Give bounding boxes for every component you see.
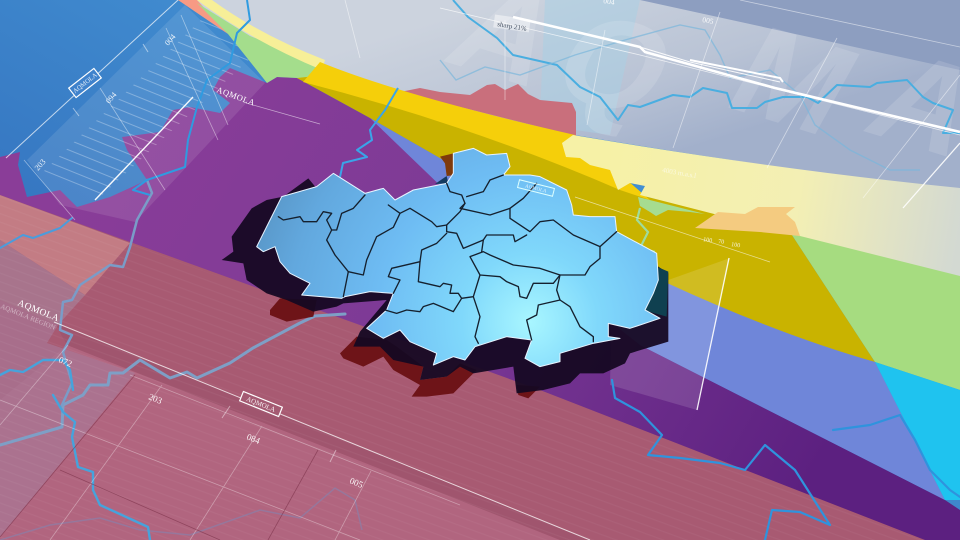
band: bright gold xyxy=(303,62,650,200)
label: sharp 21% tag xyxy=(493,15,531,33)
rivers: purple field xyxy=(612,380,960,540)
label: AQMOLA lower: AQMOLA xyxy=(16,299,61,324)
grid lines: dark bottom xyxy=(0,375,318,540)
label: faint text on yellow: 4003 m.a.s.l xyxy=(662,166,697,180)
band: periwinkle xyxy=(370,118,945,500)
river: green coast xyxy=(637,208,655,252)
tick labels: top left: 094 xyxy=(104,90,119,105)
panel: red land xyxy=(0,195,925,540)
patch: red land on grey field xyxy=(400,84,576,136)
district borders xyxy=(278,175,617,343)
band: cyan xyxy=(875,362,960,500)
tick labels: top left: 004 xyxy=(163,32,178,47)
band: green xyxy=(790,232,960,390)
rivers: red field xyxy=(0,180,345,540)
tick labels: right inset: 100 xyxy=(703,237,712,244)
scale line: thick white double line top right xyxy=(440,0,960,135)
tick labels: top left xyxy=(33,32,178,172)
label: AQMOLA lower: AQMOLA REGION xyxy=(0,302,57,332)
scale line: top left with label box xyxy=(6,0,178,158)
band: pale yellow strip xyxy=(197,0,325,70)
panel: top-right grey map field xyxy=(178,0,960,190)
panel: darker scale strip xyxy=(54,322,590,540)
river: upper left xyxy=(133,0,250,195)
band: green strip xyxy=(197,3,330,95)
scale line: bottom with label box xyxy=(54,322,590,540)
tick labels: right inset: 100 xyxy=(731,242,740,249)
thick white line: right inset xyxy=(697,258,729,410)
panel: pale left inset lower xyxy=(0,300,135,537)
patch: orange coast xyxy=(695,207,800,236)
thin line across the gold xyxy=(575,197,770,262)
tick labels: right inset xyxy=(703,237,740,249)
label: map tag xyxy=(518,180,554,196)
scale line: bottom with label box: AQMOLA xyxy=(245,395,277,414)
tick labels: top left: 203 xyxy=(33,157,48,172)
panel: light blue overlay at upper left xyxy=(27,5,265,222)
panel: lilac left inset xyxy=(0,240,85,325)
tick labels: bottom: 084 xyxy=(245,432,262,446)
grid lines: top right xyxy=(345,0,960,198)
map outline xyxy=(257,148,660,367)
thick white scale line: upper left xyxy=(95,97,193,200)
river: top right faint xyxy=(440,25,920,170)
thick white line: right xyxy=(903,143,960,208)
map: region with district borders xyxy=(257,148,660,367)
tick labels: right inset: 70 xyxy=(718,239,724,246)
panel: lighter inset right of map xyxy=(610,258,730,410)
tick labels: bottom xyxy=(57,355,365,490)
tick labels: bottom: 072 xyxy=(57,355,74,369)
band: pale yellow with coast xyxy=(562,135,960,276)
grid lines: top left xyxy=(24,15,228,220)
tick labels: top right: 005 xyxy=(702,15,715,26)
panel: lower red inset xyxy=(0,345,560,540)
hatched scale xyxy=(43,18,267,197)
tick labels: bottom: 005 xyxy=(348,476,365,490)
map shadow: black xyxy=(222,153,668,393)
red field stripes xyxy=(0,195,925,540)
label: AQMOLA upper xyxy=(215,84,320,124)
label: AQMOLA upper: AQMOLA xyxy=(215,84,257,108)
river: central xyxy=(340,88,398,177)
label: map tag: AQMOLA xyxy=(524,184,547,195)
band: dark gold xyxy=(297,75,875,362)
map shadow: dark red xyxy=(270,298,540,398)
tick labels: bottom: 203 xyxy=(147,392,164,406)
scale line: top left with label box: AQMOLA xyxy=(72,72,99,95)
grid lines: bottom xyxy=(0,345,460,540)
patch: green coast xyxy=(638,197,705,216)
band: salmon sliver xyxy=(178,0,228,34)
river: top right main xyxy=(453,0,960,133)
panel: salmon left inset xyxy=(0,195,130,295)
watermark lettering: M xyxy=(706,0,882,161)
watermark lettering xyxy=(426,0,960,182)
label: sharp 21% tag: sharp 21% xyxy=(497,20,527,33)
river: faint lower xyxy=(0,488,362,540)
tick labels: top right xyxy=(603,0,715,26)
